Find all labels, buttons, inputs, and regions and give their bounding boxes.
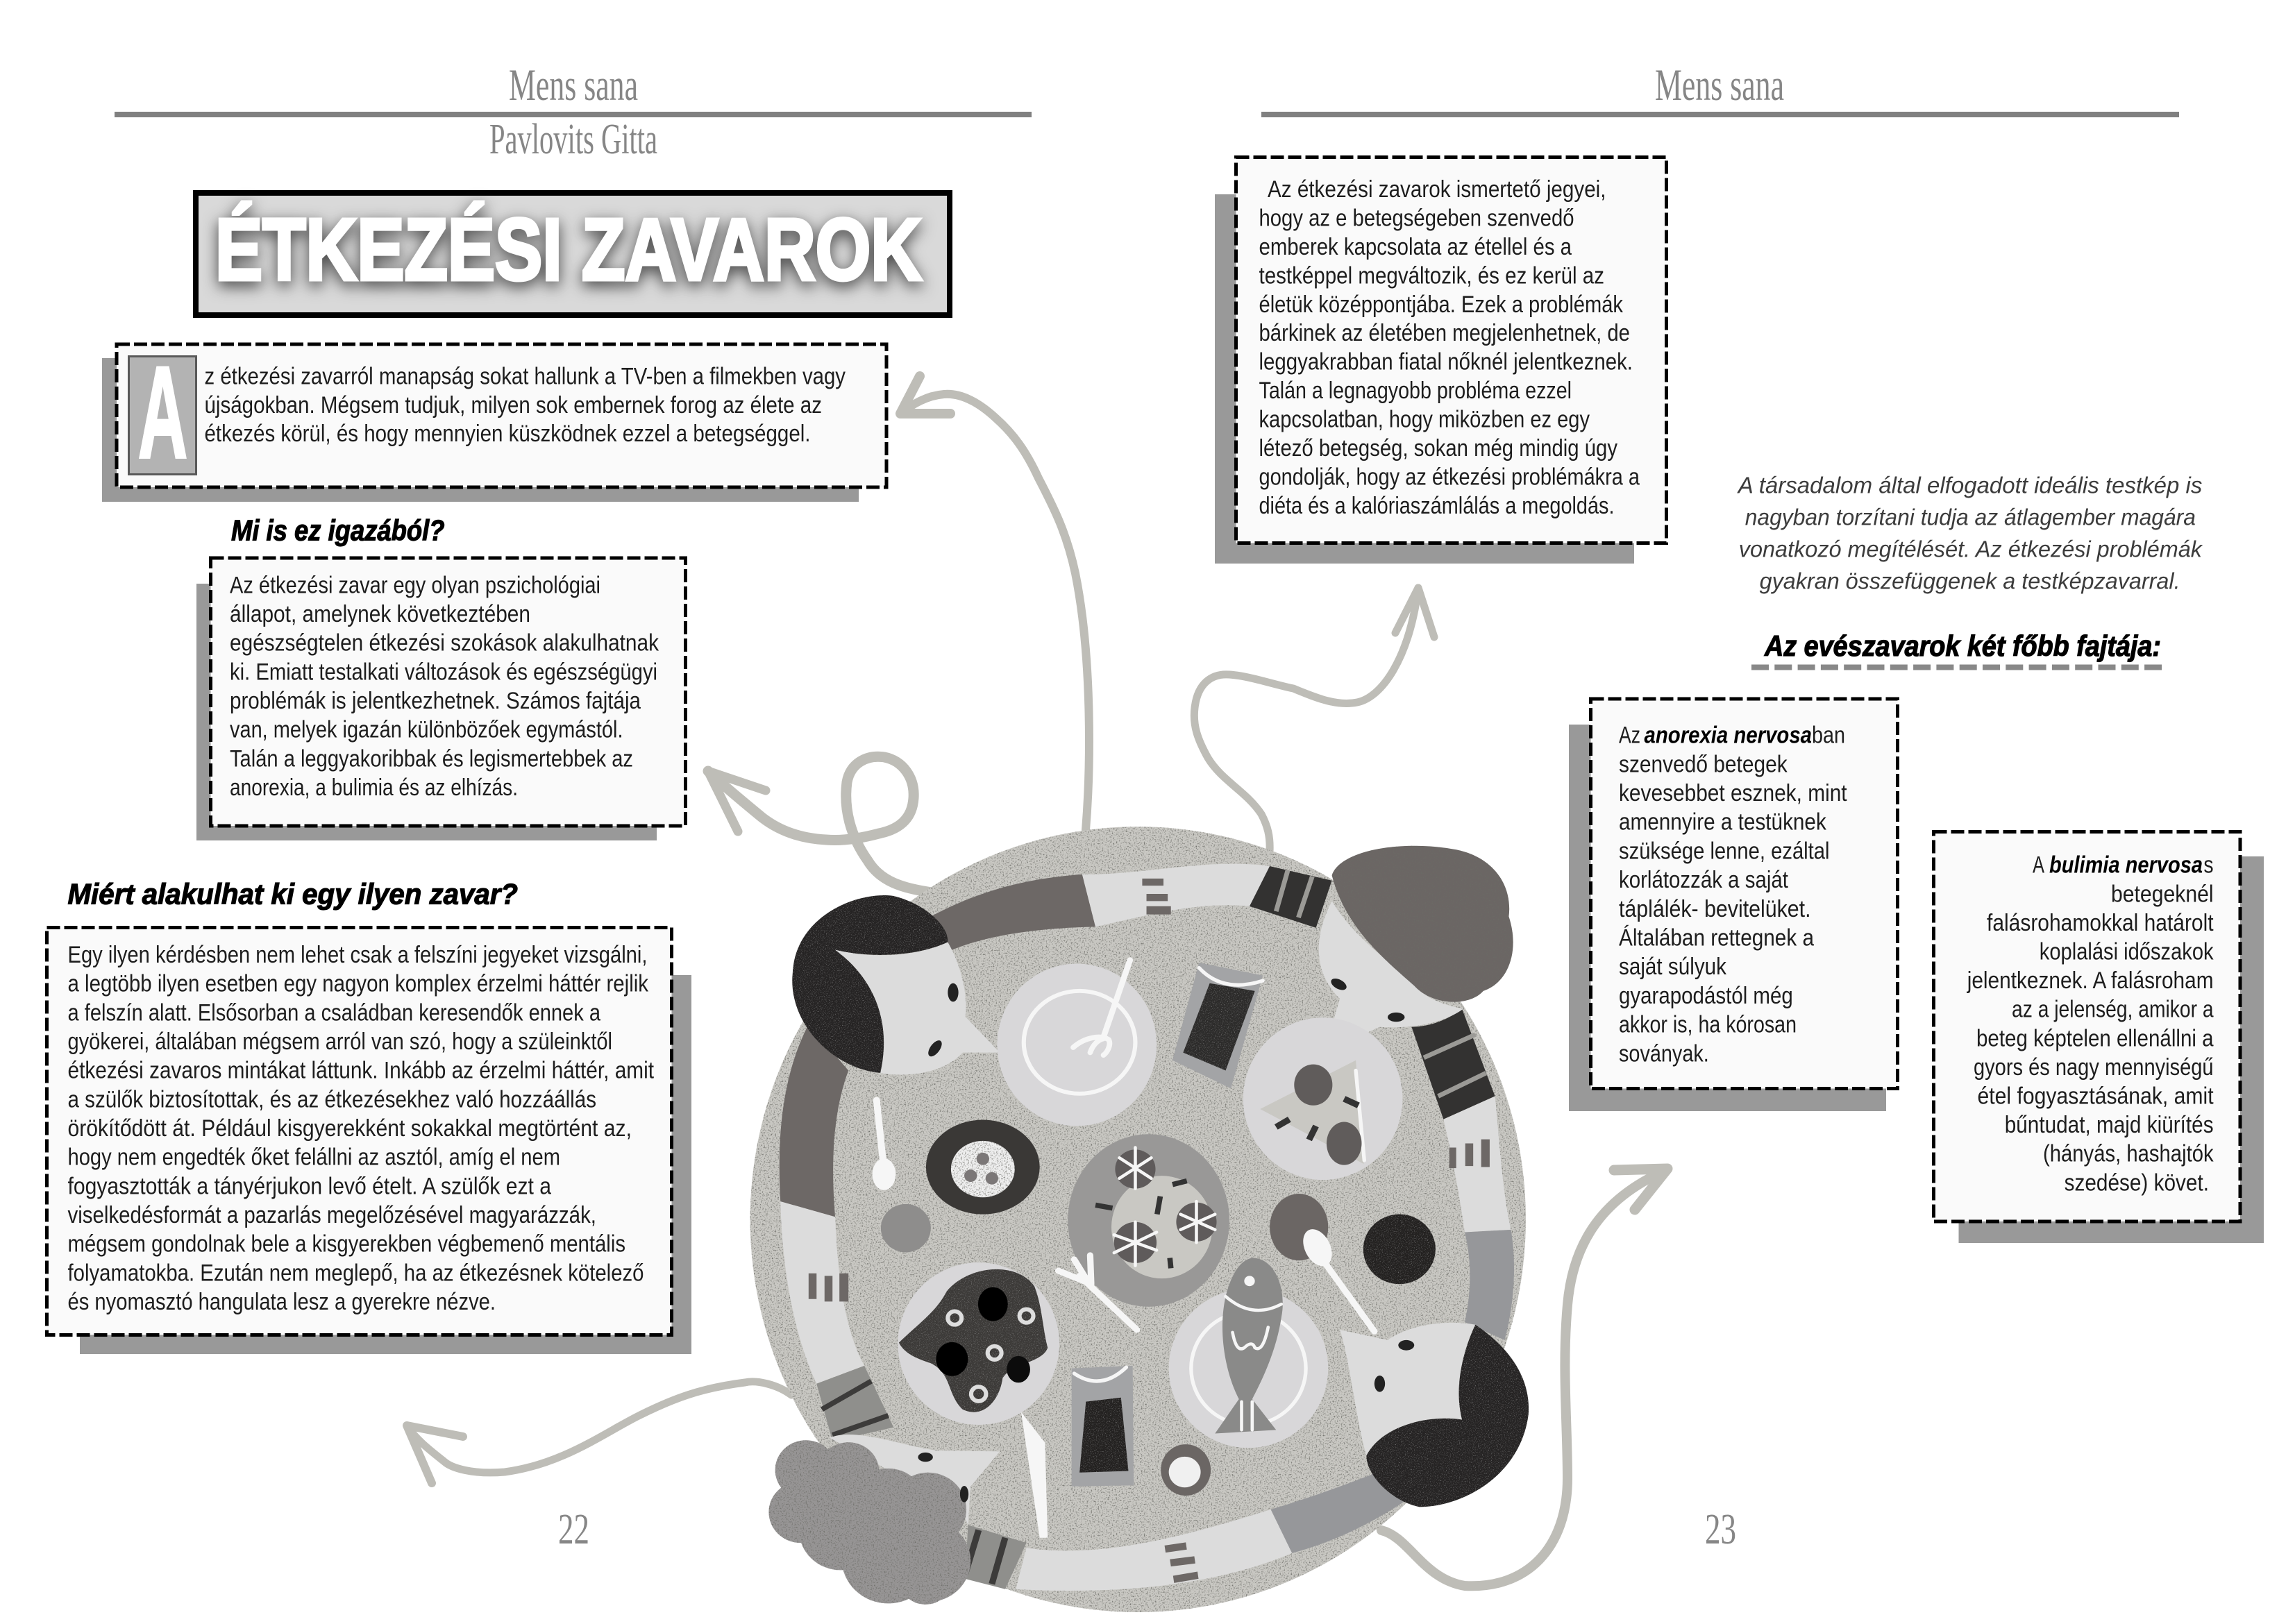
arrow: to eating disorder types xyxy=(1381,1169,1667,1586)
panel: anorexia: ban xyxy=(1812,722,1845,749)
italic pull quote: vonatkozó megítélését. Az étkezési problémák xyxy=(1739,536,2203,562)
panel: bulimia: falásrohamokkal határolt xyxy=(1987,910,2214,936)
brown circle xyxy=(1270,1194,1328,1260)
panel: definition xyxy=(196,558,686,840)
panel: bulimia: A xyxy=(2033,852,2044,879)
panel: causes: folyamatokba. Ezután nem meglepő, ha az étkezésnek kötelező xyxy=(68,1260,644,1286)
panel: bulimia: jelentkeznek. A falásroham xyxy=(1967,967,2214,994)
panel: symptoms xyxy=(1215,157,1666,564)
panel: definition: Az étkezési zavar egy olyan pszichológiai xyxy=(230,572,600,598)
panel: definition: van, melyek igazán különbözőek egymástól. xyxy=(230,717,623,743)
panel: anorexia: soványak. xyxy=(1619,1040,1709,1067)
right arm xyxy=(1411,1009,1514,1340)
panel: intro xyxy=(102,339,886,502)
dark bowl xyxy=(926,1120,1040,1215)
panel: bulimia: (hányás, hashajtók xyxy=(2043,1141,2214,1167)
panel: anorexia: Az xyxy=(1619,722,1640,749)
panel: bulimia: étel fogyasztásának, amit xyxy=(1977,1083,2214,1109)
panel: bulimia: gyors és nagy mennyiségű xyxy=(1974,1054,2214,1081)
panel: definition: problémák is jelentkezhetnek. Számos fajtája xyxy=(230,688,641,714)
panel: anorexia: anorexia nervosa xyxy=(1644,722,1812,749)
person: dark bob hair, top left xyxy=(792,895,1000,1074)
heading: what is it: Mi is ez igazából? xyxy=(231,514,444,546)
drop cap: A xyxy=(138,339,187,485)
panel: anorexia xyxy=(1569,699,1898,1111)
panel: causes xyxy=(47,927,691,1354)
table top xyxy=(750,827,1526,1612)
panel: causes: örökítődött át. Például kisgyerekként sokakkal megtörtént az, xyxy=(68,1115,632,1142)
panel: anorexia: akkor is, ha kórosan xyxy=(1619,1012,1797,1038)
person: grey curly hair, bottom left xyxy=(768,1435,1000,1605)
panel: anorexia: szenvedő betegek xyxy=(1619,751,1788,777)
panel: bulimia: s xyxy=(2203,852,2214,879)
title banner: ÉTKEZÉSI ZAVAROK xyxy=(215,201,922,298)
panel: anorexia: szüksége lenne, ezáltal xyxy=(1619,838,1830,864)
plate with pizza slice xyxy=(1243,1017,1402,1180)
person: dark bob hair, bottom right xyxy=(1340,1323,1529,1507)
panel: definition: egészségtelen étkezési szokások alakulhatnak xyxy=(230,630,659,657)
glass bottom xyxy=(1072,1366,1134,1487)
panel: causes: étkezési zavaros mintákat láttunk. Inkább az érzelmi háttér, amit xyxy=(68,1058,654,1084)
italic pull quote: gyakran összefüggenek a testképzavarral. xyxy=(1760,568,2180,593)
panel: anorexia: kevesebbet esznek, mint xyxy=(1619,780,1847,806)
knife xyxy=(1021,1412,1048,1538)
arrow: loop to definition panel xyxy=(708,756,932,893)
panel: bulimia: bűntudat, majd kiürítés xyxy=(2005,1112,2214,1138)
spoon right xyxy=(1297,1225,1375,1331)
person: brown curly hair, top right xyxy=(1319,846,1513,1053)
panel: bulimia xyxy=(1934,831,2264,1243)
panel: intro: újságokban. Mégsem tudjuk, milyen sok embernek forog az élete az xyxy=(204,392,822,418)
black circle xyxy=(1363,1215,1436,1284)
panel: symptoms: hogy az e betegségeben szenvedő xyxy=(1259,205,1574,231)
drop cap xyxy=(129,339,196,485)
panel: definition: Talán a leggyakoribbak és legismertebbek az xyxy=(230,745,633,772)
panel: symptoms: gondolják, hogy az étkezési problémákra a xyxy=(1259,464,1640,490)
heading: why it develops: Miért alakulhat ki egy ilyen zavar? xyxy=(68,877,518,911)
plate with dark food xyxy=(898,1262,1059,1425)
glass top xyxy=(1172,963,1263,1088)
italic pull quote xyxy=(1737,473,2203,593)
panel: bulimia: betegeknél xyxy=(2111,881,2214,907)
panel: anorexia: amennyire a testüknek xyxy=(1619,809,1827,836)
heading: two main types: Az evészavarok két főbb fajtája: xyxy=(1764,629,2161,662)
panel: symptoms: életük középpontjába. Ezek a problémák xyxy=(1259,291,1624,318)
top arm xyxy=(931,864,1332,954)
left page header xyxy=(115,60,1032,117)
panel: causes: fogyasztották a tányérjukon levő ételt. A szülők ezt a xyxy=(68,1173,551,1199)
panel: symptoms: diéta és a kalóriaszámlálás a megoldás. xyxy=(1259,493,1615,519)
panel: causes: viselkedésformát a pazarlás megelőzésével magyarázzák, xyxy=(68,1202,596,1228)
italic pull quote: A társadalom által elfogadott ideális testkép is xyxy=(1737,473,2202,498)
panel: bulimia: szedése) követ. xyxy=(2065,1169,2209,1196)
plate with fish xyxy=(1169,1258,1328,1448)
panel: definition: anorexia, a bulimia és az elhízás. xyxy=(230,775,518,801)
panel: causes: gyökerei, általában mégsem arról van szó, hogy a szüleinktől xyxy=(68,1029,612,1055)
author name: Pavlovits Gitta xyxy=(489,116,657,163)
panel: causes: Egy ilyen kérdésben nem lehet csak a felszíni jegyeket vizsgálni, xyxy=(68,942,647,968)
panel: anorexia: táplálék- bevitelüket. xyxy=(1619,896,1810,922)
panel: intro: z étkezési zavarról manapság sokat hallunk a TV-ben a filmekben vagy xyxy=(204,364,846,390)
bottom arm xyxy=(966,1466,1411,1591)
panel: anorexia: gyarapodástól még xyxy=(1619,983,1793,1009)
fork centre xyxy=(1058,1255,1137,1330)
arrow: to symptoms panel xyxy=(1194,588,1434,852)
small cup xyxy=(1161,1444,1211,1496)
panel: symptoms: létező betegség, sokan még mindig úgy xyxy=(1259,435,1617,462)
italic pull quote: nagyban torzítani tudja az átlagember magára xyxy=(1745,505,2196,530)
spoon left xyxy=(873,1100,896,1190)
panel: definition: állapot, amelynek következtében xyxy=(230,601,530,627)
panel: symptoms: Az étkezési zavarok ismertető jegyei, xyxy=(1268,176,1606,203)
panel: symptoms: emberek kapcsolata az étellel és a xyxy=(1259,234,1572,260)
grey circle xyxy=(881,1204,931,1252)
panel: symptoms: kapcsolatban, hogy miközben ez egy xyxy=(1259,407,1590,433)
left arm xyxy=(780,1024,893,1441)
panel: definition: ki. Emiatt testalkati változások és egészségügyi xyxy=(230,659,657,685)
panel: causes: hogy nem engedték őket felállni az asztól, amíg el nem xyxy=(68,1144,560,1171)
panel: bulimia: bulimia nervosa xyxy=(2049,852,2203,879)
arrow: to intro panel xyxy=(900,376,1089,830)
left page header: Mens sana xyxy=(509,60,638,110)
panel: symptoms: testképpel megváltozik, és ez kerül az xyxy=(1259,262,1604,289)
panel: bulimia: beteg képtelen ellenállni a xyxy=(1976,1025,2214,1051)
plate with fork xyxy=(997,960,1157,1126)
panel: causes: és nyomasztó hangulata lesz a gyerekre nézve. xyxy=(68,1289,496,1315)
page number 23: 23 xyxy=(1705,1506,1736,1553)
panel: symptoms: Talán a legnagyobb probléma ezzel xyxy=(1259,378,1572,404)
panel: bulimia: koplalási időszakok xyxy=(2040,938,2214,965)
panel: symptoms: bárkinek az életében megjelenhetnek, de xyxy=(1259,320,1630,346)
panel: causes: mégsem gondolnak bele a kisgyerekben végbemenő mentális xyxy=(68,1231,625,1258)
panel: causes: a legtöbb ilyen esetben egy nagyon komplex érzelmi háttér rejlik xyxy=(68,971,649,997)
panel: anorexia: Általában rettegnek a xyxy=(1619,924,1814,951)
panel: intro: étkezés körül, és hogy mennyien küszködnek ezzel a betegséggel. xyxy=(204,421,811,447)
panel: symptoms: leggyakrabban fiatal nőknél jelentkeznek. xyxy=(1259,349,1633,375)
panel: anorexia: saját súlyuk xyxy=(1619,954,1727,980)
panel: causes: a szülők biztosítottak, és az étkezésekhez való hozzáállás xyxy=(68,1086,596,1113)
page number 22: 22 xyxy=(558,1506,589,1553)
right page header: Mens sana xyxy=(1655,60,1784,110)
panel: bulimia: az a jelenség, amikor a xyxy=(2012,997,2214,1023)
panel: anorexia: korlátozzák a saját xyxy=(1619,867,1788,893)
title banner xyxy=(196,193,950,315)
illustration: dinner table from above xyxy=(750,827,1529,1612)
right page header xyxy=(1261,60,2179,117)
centre dish xyxy=(1068,1134,1229,1307)
panel: causes: a felszín alatt. Elsősorban a családban keresendők ennek a xyxy=(68,999,600,1026)
arrow: to causes panel xyxy=(407,1382,791,1483)
